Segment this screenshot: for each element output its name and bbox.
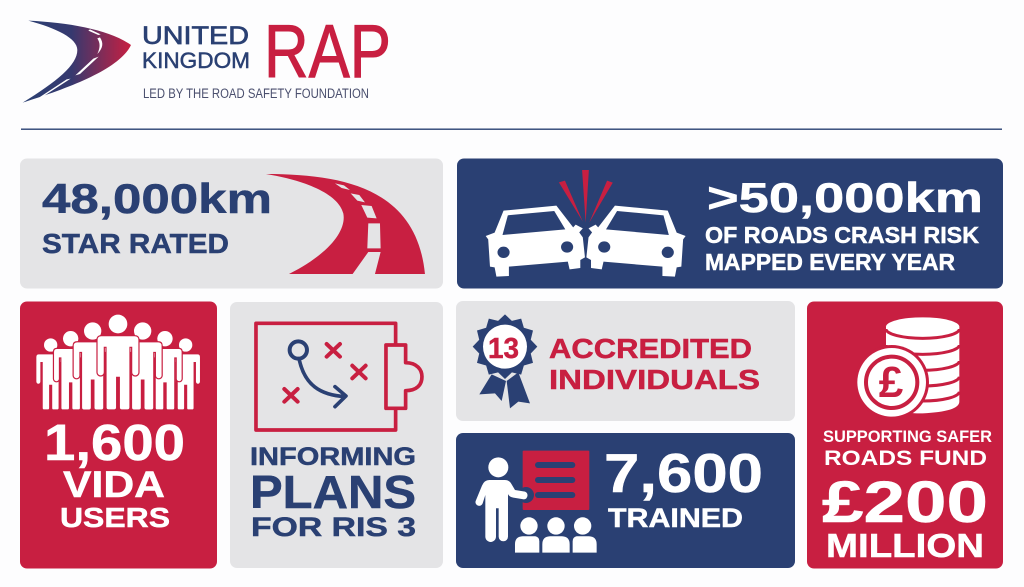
label: users: USERS (60, 502, 170, 533)
label: individuals: INDIVIDUALS (549, 364, 760, 395)
icon: trainer (475, 457, 527, 542)
icon: rosette badge (473, 314, 537, 408)
panel: 13 accredited individuals (456, 301, 795, 421)
panel background (807, 302, 1003, 568)
stat: 7,600: 7,600 (604, 442, 763, 504)
label: accredited: ACCREDITED (549, 333, 752, 364)
icon: logo road swoosh (23, 21, 131, 103)
badge number: 13 (488, 333, 519, 365)
panel: 48,000km star rated (20, 158, 443, 288)
icon: left car (486, 206, 585, 277)
label: VIDA: VIDA (63, 464, 165, 505)
panel: 7,600 trained (456, 433, 795, 568)
panel background (20, 302, 217, 568)
label: mapped every year: MAPPED EVERY YEAR (705, 249, 955, 275)
label: million: MILLION (826, 527, 984, 564)
header logo (23, 9, 391, 103)
logo text: United: UNITED (142, 22, 249, 50)
stat: 1,600: 1,600 (44, 414, 185, 471)
stat: 48,000km: 48,000km (42, 175, 272, 222)
label: plans: PLANS (250, 466, 416, 518)
icon: right car (586, 206, 686, 277)
label: roads fund: ROADS FUND (824, 447, 987, 470)
icon: presentation board (518, 451, 589, 510)
icon: pound sign: £ (879, 358, 904, 407)
panel: informing plans for RIS 3 (230, 302, 443, 568)
panel background (20, 158, 443, 288)
stat: >50,000km: >50,000km (707, 174, 983, 221)
logo text: Kingdom: KINGDOM (142, 48, 250, 73)
icon: two cars colliding (486, 170, 686, 277)
icon: pound coin (854, 345, 929, 420)
stat: £200: £200 (822, 470, 988, 535)
label: supporting safer: SUPPORTING SAFER (823, 428, 992, 446)
panel background (230, 302, 443, 568)
panel background (456, 433, 795, 568)
icon: pound coin stack (854, 317, 959, 420)
icon: audience (515, 517, 597, 553)
panel background (457, 158, 1003, 288)
icon: impact sparks (559, 170, 613, 223)
icon: tactics board (256, 323, 422, 430)
panel: over 50,000km crash risk mapped (457, 158, 1003, 288)
label: informing: INFORMING (250, 443, 416, 471)
panel background (456, 301, 795, 421)
panel: 1,600 VIDA users (20, 302, 217, 568)
icon: trainer with audience (475, 451, 597, 553)
label: of roads crash risk: OF ROADS CRASH RISK (705, 222, 979, 248)
label: trained: TRAINED (608, 503, 743, 533)
panel: safer roads fund 200 million (807, 302, 1003, 568)
label: star rated: STAR RATED (42, 228, 229, 259)
logo tagline: LED BY THE ROAD SAFETY FOUNDATION (143, 86, 369, 101)
icon: crowd of people (36, 315, 201, 410)
icon: stacked coins (886, 317, 959, 413)
label: for RIS 3: FOR RIS 3 (251, 512, 416, 542)
logo text: RAP: RAP (264, 9, 391, 93)
icon: curved red road (266, 174, 425, 274)
